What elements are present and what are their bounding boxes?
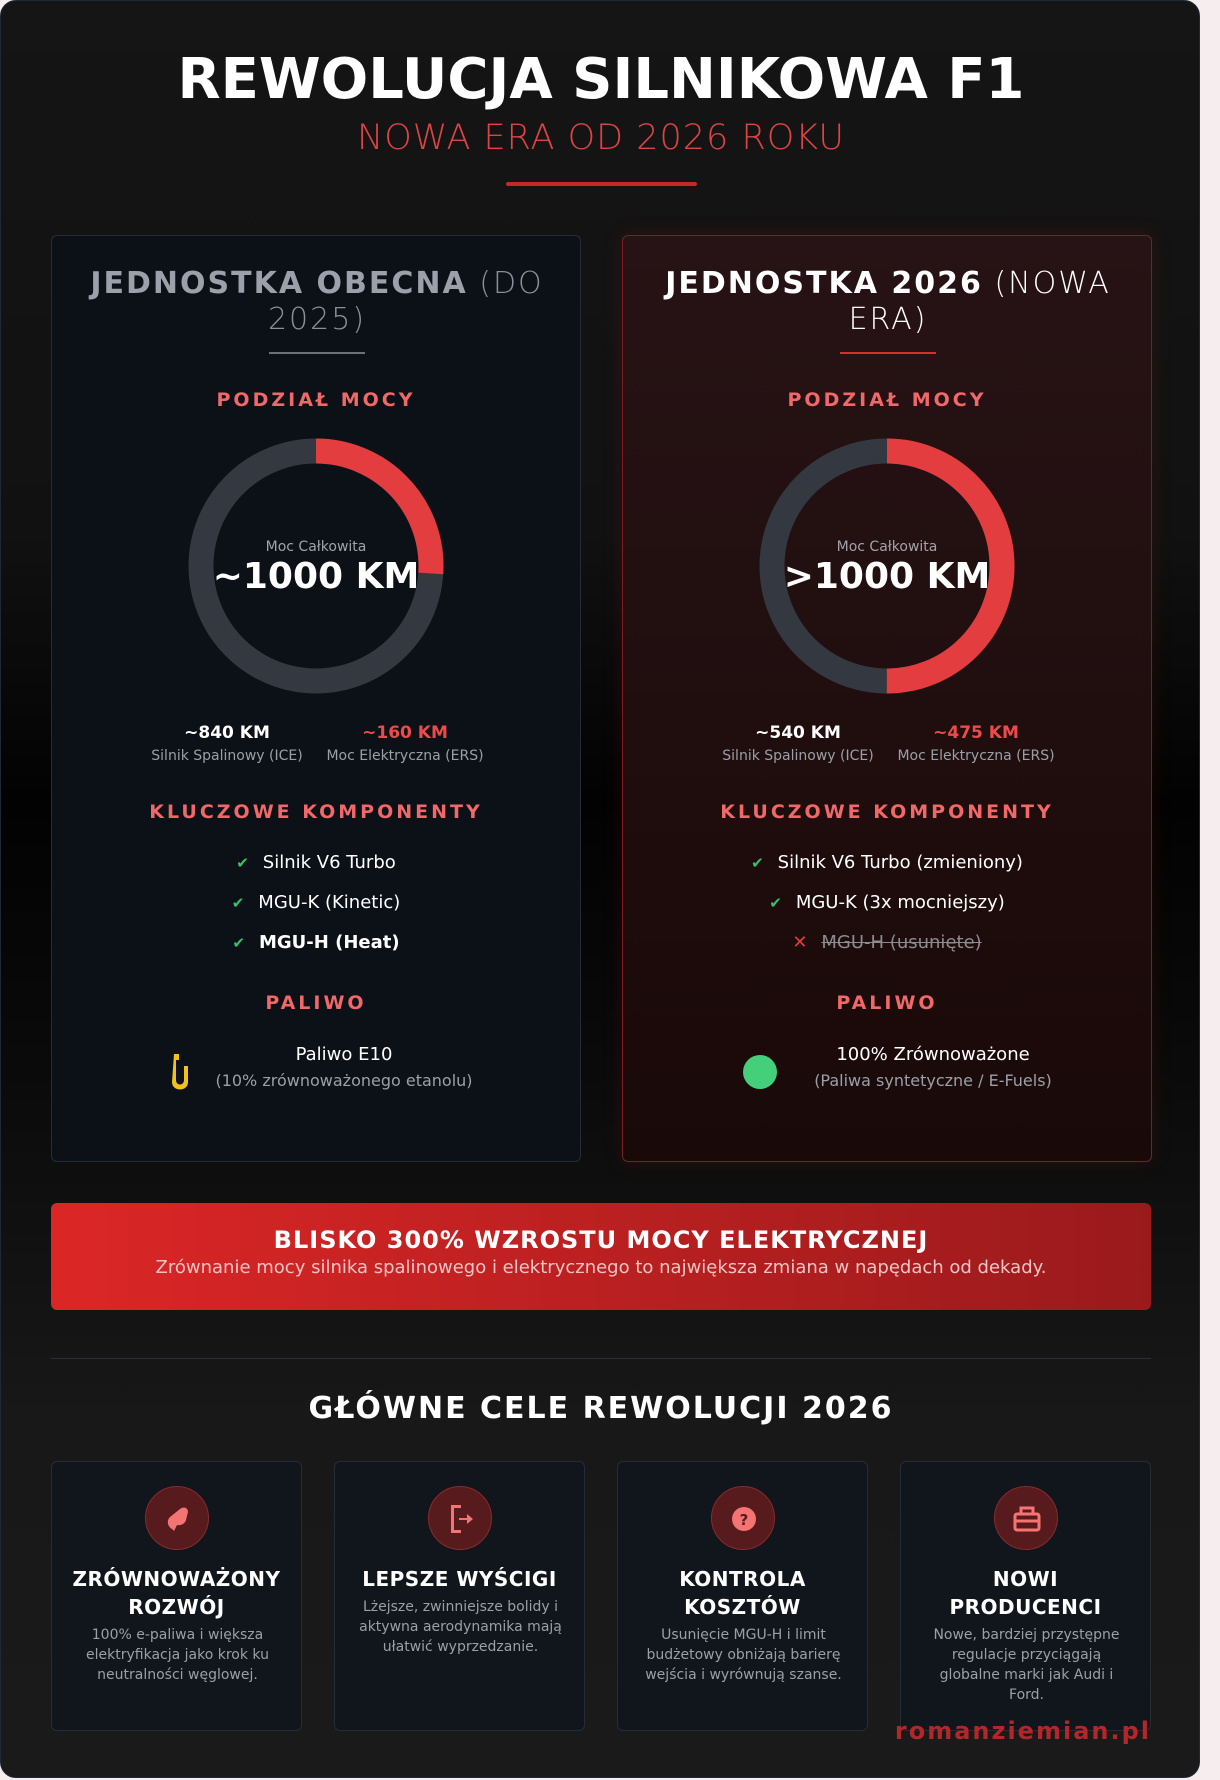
fuel text bbox=[814, 1044, 1052, 1090]
stat: ICE: Silnik Spalinowy (ICE) bbox=[151, 748, 303, 764]
banner: electric power increase: BLISKO 300% WZROSTU MOCY ELEKTRYCZNEJ bbox=[274, 1226, 928, 1254]
icon: coin: ? bbox=[740, 1511, 748, 1529]
fuel text: 100% Zrównoważone bbox=[836, 1044, 1030, 1065]
component list: ✔ MGU-K (Kinetic) bbox=[232, 892, 400, 913]
card: sustainability: 100% e-paliwa i większa elektryfikacja jako krok ku neutralności węglowej. bbox=[86, 1627, 269, 1683]
heading: main goals: GŁÓWNE CELE REWOLUCJI 2026 bbox=[309, 1391, 893, 1426]
donut chart: >1000 KM bbox=[784, 556, 990, 597]
stat: ICE: Silnik Spalinowy (ICE) bbox=[722, 748, 874, 764]
panel heading: JEDNOSTKA 2026 (NOWA ERA) bbox=[665, 266, 1111, 337]
card: better racing: Lżejsze, zwinniejsze bolidy i aktywna aerodynamika mają ułatwić wyprzedzanie. bbox=[359, 1599, 562, 1655]
banner: electric power increase bbox=[51, 1203, 1151, 1310]
icon: briefcase bbox=[994, 1486, 1058, 1550]
stat: ERS: Moc Elektryczna (ERS) bbox=[326, 748, 484, 764]
card: better racing bbox=[334, 1461, 585, 1731]
component list: ✔ Silnik V6 Turbo bbox=[236, 852, 396, 873]
title: REWOLUCJA SILNIKOWA F1 bbox=[177, 47, 1025, 112]
card: cost control: KONTROLA bbox=[679, 1567, 806, 1591]
card: cost control bbox=[617, 1461, 868, 1731]
card: new manufacturers: Nowe, bardziej przystępne regulacje przyciągają globalne marki jak Audi i Ford. bbox=[933, 1627, 1120, 1703]
card: cost control: Usunięcie MGU-H i limit budżetowy obniżają barierę wejścia i wyrównują szanse. bbox=[645, 1627, 842, 1683]
panel heading: JEDNOSTKA OBECNA (DO 2025) bbox=[90, 266, 544, 337]
card: new manufacturers: NOWI bbox=[993, 1567, 1058, 1591]
icon: rocket bbox=[145, 1486, 209, 1550]
icon: fuel nozzle bbox=[172, 1054, 188, 1090]
icon: coin bbox=[711, 1486, 775, 1550]
component list: ✔ MGU-K (3x mocniejszy) bbox=[769, 892, 1005, 913]
stat: ERS bbox=[326, 723, 484, 764]
card: new manufacturers: PRODUCENCI bbox=[949, 1595, 1102, 1619]
heading underline bbox=[269, 352, 365, 354]
donut chart bbox=[188, 438, 444, 694]
fuel text: (Paliwa syntetyczne / E-Fuels) bbox=[814, 1071, 1052, 1090]
section: fuel: PALIWO bbox=[836, 992, 938, 1014]
stat: ICE bbox=[722, 723, 874, 764]
heading underline bbox=[840, 352, 936, 354]
section: power split: PODZIAŁ MOCY bbox=[788, 389, 986, 411]
banner: electric power increase: Zrównanie mocy silnika spalinowego i elektrycznego to największa zmiana w napędach od dekady. bbox=[156, 1257, 1046, 1278]
panel: current unit bbox=[51, 235, 581, 1162]
stat: ICE: ~540 KM bbox=[755, 723, 841, 743]
stat: ERS bbox=[897, 723, 1055, 764]
card: sustainability: ROZWÓJ bbox=[128, 1595, 225, 1619]
watermark: romanziemian.pl bbox=[895, 1717, 1151, 1745]
red title underline bbox=[506, 182, 697, 186]
card: cost control: KOSZTÓW bbox=[684, 1595, 801, 1619]
fuel text: Paliwo E10 bbox=[296, 1044, 392, 1065]
fuel text: (10% zrównoważonego etanolu) bbox=[215, 1071, 473, 1090]
panel: 2026 unit bbox=[622, 235, 1152, 1162]
section: components: KLUCZOWE KOMPONENTY bbox=[720, 801, 1054, 823]
subtitle: NOWA ERA OD 2026 ROKU bbox=[357, 118, 845, 158]
donut chart: Moc Całkowita bbox=[837, 539, 937, 555]
component list: ✕ MGU-H (usunięte) bbox=[792, 932, 982, 953]
donut chart: ~1000 KM bbox=[213, 556, 419, 597]
card: better racing: LEPSZE WYŚCIGI bbox=[362, 1567, 557, 1591]
section: components: KLUCZOWE KOMPONENTY bbox=[149, 801, 483, 823]
stat: ICE: ~840 KM bbox=[184, 723, 270, 743]
section: power split: PODZIAŁ MOCY bbox=[216, 389, 415, 411]
icon: green leaf dot bbox=[743, 1055, 777, 1089]
component list bbox=[232, 852, 400, 953]
stat: ERS: ~160 KM bbox=[362, 723, 448, 743]
component list: ✔ MGU-H (Heat) bbox=[232, 932, 400, 953]
icon: exit arrow bbox=[428, 1486, 492, 1550]
stat: ERS: ~475 KM bbox=[933, 723, 1019, 743]
component list bbox=[751, 852, 1023, 953]
fuel text bbox=[215, 1044, 473, 1090]
card: sustainability: ZRÓWNOWAŻONY bbox=[72, 1567, 281, 1591]
donut chart: Moc Całkowita bbox=[266, 539, 366, 555]
donut chart bbox=[760, 438, 1014, 694]
card: sustainability bbox=[51, 1461, 302, 1731]
section: fuel: PALIWO bbox=[265, 992, 367, 1014]
stat: ERS: Moc Elektryczna (ERS) bbox=[897, 748, 1055, 764]
card: new manufacturers bbox=[900, 1461, 1151, 1731]
stat: ICE bbox=[151, 723, 303, 764]
component list: ✔ Silnik V6 Turbo (zmieniony) bbox=[751, 852, 1023, 873]
